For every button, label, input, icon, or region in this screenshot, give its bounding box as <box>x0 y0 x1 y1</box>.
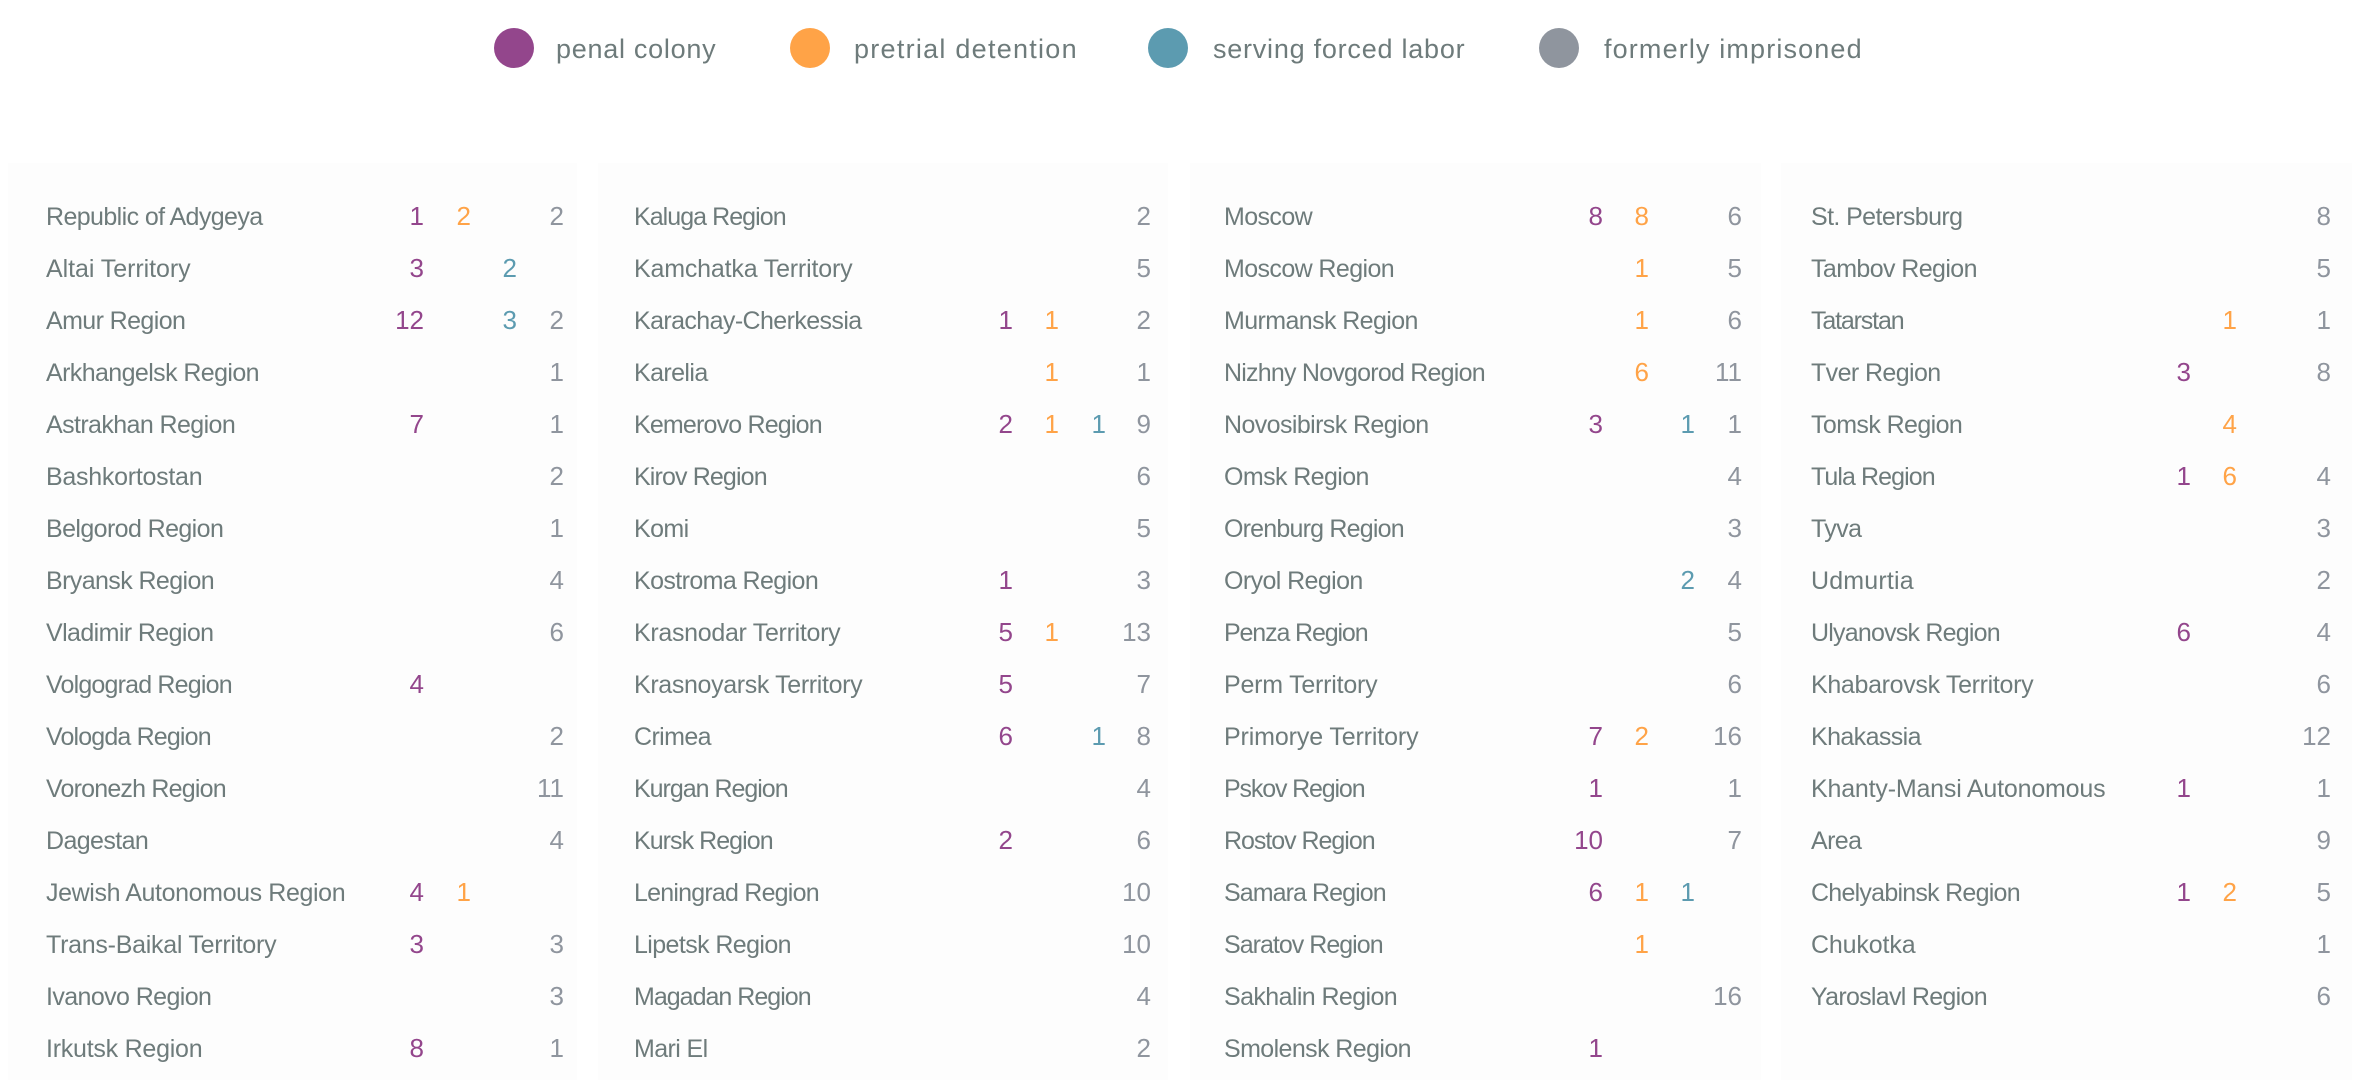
row: Kaluga Region: 2 <box>1137 201 1151 231</box>
row: Kurgan Region: Kurgan Region <box>634 775 788 803</box>
row: Kursk Region <box>634 825 1151 855</box>
legend <box>494 28 1862 68</box>
row: Kemerovo Region: 1 <box>1092 409 1106 439</box>
row: St. Petersburg: 8 <box>2317 201 2331 231</box>
row: Kemerovo Region <box>634 409 1151 439</box>
row: Voronezh Region <box>46 773 564 803</box>
row: Omsk Region: 4 <box>1728 461 1742 491</box>
row: Trans-Baikal Territory <box>46 929 564 959</box>
row: Ulyanovsk Region: 4 <box>2317 617 2331 647</box>
row: Primorye Territory: 2 <box>1635 721 1649 751</box>
panel: column 2 <box>598 163 1168 1080</box>
row: Karelia: 1 <box>1045 357 1059 387</box>
row: Republic of Adygeya: 1 <box>410 201 424 231</box>
row: Kemerovo Region: 9 <box>1137 409 1151 439</box>
row: Oryol Region: Oryol Region <box>1224 567 1363 595</box>
row: Ulyanovsk Region <box>1811 617 2331 647</box>
row: Khabarovsk Territory <box>1811 669 2331 699</box>
row: Krasnoyarsk Territory: 7 <box>1137 669 1151 699</box>
row: Kostroma Region: 1 <box>999 565 1013 595</box>
row: Republic of Adygeya: Republic of Adygeya <box>46 203 263 231</box>
row: Komi: 5 <box>1137 513 1151 543</box>
row: Krasnodar Territory: Krasnodar Territory <box>634 619 841 647</box>
row: Rostov Region <box>1224 825 1742 855</box>
row: Tula Region: 6 <box>2223 461 2237 491</box>
row: Tatarstan: 1 <box>2317 305 2331 335</box>
row: Karelia: 1 <box>1137 357 1151 387</box>
row: Kostroma Region <box>634 565 1151 595</box>
row: Kamchatka Territory <box>634 253 1151 283</box>
legend item: pretrial detention: pretrial detention <box>854 34 1077 64</box>
row: Udmurtia: Udmurtia <box>1811 567 1914 595</box>
row: Karachay-Cherkessia <box>634 305 1151 335</box>
row: Krasnoyarsk Territory: Krasnoyarsk Territory <box>634 671 863 699</box>
row: Ulyanovsk Region: Ulyanovsk Region <box>1811 619 2000 647</box>
row: Udmurtia <box>1811 565 2331 595</box>
row: Kirov Region: Kirov Region <box>634 463 767 491</box>
row: Smolensk Region <box>1224 1033 1603 1063</box>
row: Arkhangelsk Region: 1 <box>550 357 564 387</box>
row: Khakassia: 12 <box>2302 721 2331 751</box>
row: Volgograd Region: 4 <box>410 669 424 699</box>
row: Karachay-Cherkessia: 2 <box>1137 305 1151 335</box>
row: Novosibirsk Region <box>1224 409 1742 439</box>
row: Perm Territory: Perm Territory <box>1224 671 1378 699</box>
row: Altai Territory: 3 <box>410 253 424 283</box>
row: Arkhangelsk Region: Arkhangelsk Region <box>46 359 259 387</box>
row: Karelia <box>634 357 1151 387</box>
row: Bryansk Region: 4 <box>550 565 564 595</box>
row: Republic of Adygeya: 2 <box>550 201 564 231</box>
row: Pskov Region: Pskov Region <box>1224 775 1365 803</box>
row: Trans-Baikal Territory: 3 <box>410 929 424 959</box>
row: Astrakhan Region <box>46 409 564 439</box>
legend item: serving forced labor: serving forced labor <box>1213 34 1465 64</box>
row: Krasnoyarsk Territory <box>634 669 1151 699</box>
row: Area <box>1811 825 2331 855</box>
row: Komi: Komi <box>634 515 689 543</box>
legend item: pretrial detention <box>790 28 1077 68</box>
row: Volgograd Region: Volgograd Region <box>46 671 232 699</box>
row: Altai Territory: Altai Territory <box>46 255 191 283</box>
row: Tomsk Region <box>1811 409 2237 439</box>
row: Ivanovo Region <box>46 981 564 1011</box>
row: Karelia: Karelia <box>634 359 708 387</box>
row: Crimea: 8 <box>1137 721 1151 751</box>
row: Samara Region <box>1224 877 1695 907</box>
row: Komi <box>634 513 1151 543</box>
row: Tver Region: 3 <box>2177 357 2191 387</box>
legend item: formerly imprisoned <box>1539 28 1862 68</box>
row: Amur Region: 2 <box>550 305 564 335</box>
row: Samara Region: 1 <box>1681 877 1695 907</box>
row: Murmansk Region <box>1224 305 1742 335</box>
row: Primorye Territory <box>1224 721 1742 751</box>
row: Kirov Region <box>634 461 1151 491</box>
row: Pskov Region <box>1224 773 1742 803</box>
row: Rostov Region: 10 <box>1574 825 1603 855</box>
row: Omsk Region <box>1224 461 1742 491</box>
row: Kamchatka Territory: Kamchatka Territory <box>634 255 853 283</box>
row: Tomsk Region: Tomsk Region <box>1811 411 1962 439</box>
legend item: penal colony: penal colony <box>556 34 716 64</box>
row: St. Petersburg: St. Petersburg <box>1811 203 1962 231</box>
row: Chukotka: 1 <box>2317 929 2331 959</box>
row: Jewish Autonomous Region: 1 <box>457 877 471 907</box>
row: Dagestan: 4 <box>550 825 564 855</box>
row: Leningrad Region: 10 <box>1122 877 1151 907</box>
row: Bryansk Region: Bryansk Region <box>46 567 214 595</box>
row: Penza Region <box>1224 617 1742 647</box>
row: Vologda Region: Vologda Region <box>46 723 211 751</box>
row: Ulyanovsk Region: 6 <box>2177 617 2191 647</box>
row: Kemerovo Region: 1 <box>1045 409 1059 439</box>
row: Moscow Region <box>1224 253 1742 283</box>
row: Tyva <box>1811 513 2331 543</box>
row: Krasnodar Territory: 5 <box>999 617 1013 647</box>
row: Oryol Region: 2 <box>1681 565 1695 595</box>
row: Bashkortostan <box>46 461 564 491</box>
legend item: serving forced labor <box>1148 28 1465 68</box>
row: Kemerovo Region: 2 <box>999 409 1013 439</box>
row: Vologda Region <box>46 721 564 751</box>
row: Amur Region: 3 <box>503 305 517 335</box>
row: Sakhalin Region: 16 <box>1713 981 1742 1011</box>
row: Samara Region: Samara Region <box>1224 879 1386 907</box>
row: Leningrad Region: Leningrad Region <box>634 879 819 907</box>
row: Yaroslavl Region: Yaroslavl Region <box>1811 983 1987 1011</box>
row: Khanty-Mansi Autonomous: 1 <box>2177 773 2191 803</box>
panel: column 4 <box>1781 163 2352 1080</box>
row: Irkutsk Region: Irkutsk Region <box>46 1035 202 1063</box>
row: Primorye Territory: 7 <box>1589 721 1603 751</box>
row: Udmurtia: 2 <box>2317 565 2331 595</box>
row: Arkhangelsk Region <box>46 357 564 387</box>
row: Crimea: Crimea <box>634 723 712 751</box>
row: Chukotka: Chukotka <box>1811 931 1916 959</box>
row: Ivanovo Region: 3 <box>550 981 564 1011</box>
row: Moscow: 8 <box>1635 201 1649 231</box>
row: Chelyabinsk Region <box>1811 877 2331 907</box>
row: Magadan Region <box>634 981 1151 1011</box>
row: Chukotka <box>1811 929 2331 959</box>
row: Oryol Region <box>1224 565 1742 595</box>
row: Crimea <box>634 721 1151 751</box>
row: Republic of Adygeya: 2 <box>457 201 471 231</box>
row: Saratov Region: 1 <box>1635 929 1649 959</box>
row: Moscow: Moscow <box>1224 203 1314 231</box>
row: Novosibirsk Region: 3 <box>1589 409 1603 439</box>
row: Bashkortostan: Bashkortostan <box>46 463 202 491</box>
row: Irkutsk Region: 8 <box>410 1033 424 1063</box>
row: Murmansk Region: 6 <box>1728 305 1742 335</box>
row: Samara Region: 6 <box>1589 877 1603 907</box>
row: Leningrad Region <box>634 877 1151 907</box>
legend item: penal colony <box>494 28 716 68</box>
row: Belgorod Region <box>46 513 564 543</box>
row: Irkutsk Region <box>46 1033 564 1063</box>
row: Saratov Region: Saratov Region <box>1224 931 1383 959</box>
row: Khabarovsk Territory: 6 <box>2317 669 2331 699</box>
row: Voronezh Region: Voronezh Region <box>46 775 226 803</box>
row: Jewish Autonomous Region <box>46 877 471 907</box>
row: Altai Territory: 2 <box>503 253 517 283</box>
row: Nizhny Novgorod Region: 11 <box>1715 357 1742 387</box>
row: Moscow Region: 5 <box>1728 253 1742 283</box>
row: Magadan Region: Magadan Region <box>634 983 811 1011</box>
panel: column 1 <box>8 163 577 1080</box>
row: Kaluga Region: Kaluga Region <box>634 203 786 231</box>
row: Chelyabinsk Region: 1 <box>2177 877 2191 907</box>
row: Karachay-Cherkessia: 1 <box>999 305 1013 335</box>
row: Krasnoyarsk Territory: 5 <box>999 669 1013 699</box>
row: Jewish Autonomous Region: 4 <box>410 877 424 907</box>
row: Rostov Region: 7 <box>1728 825 1742 855</box>
row: Vologda Region: 2 <box>550 721 564 751</box>
row: Primorye Territory: 16 <box>1713 721 1742 751</box>
row: Murmansk Region: Murmansk Region <box>1224 307 1418 335</box>
row: Tambov Region <box>1811 253 2331 283</box>
row: Altai Territory <box>46 253 517 283</box>
row: Khanty-Mansi Autonomous: Khanty-Mansi Autonomous <box>1811 775 2105 803</box>
row: St. Petersburg <box>1811 201 2331 231</box>
row: Belgorod Region: 1 <box>550 513 564 543</box>
row: Kemerovo Region: Kemerovo Region <box>634 411 822 439</box>
row: Khakassia: Khakassia <box>1811 723 1922 751</box>
row: Dagestan <box>46 825 564 855</box>
row: Voronezh Region: 11 <box>537 773 564 803</box>
row: Kostroma Region: Kostroma Region <box>634 567 818 595</box>
row: Bashkortostan: 2 <box>550 461 564 491</box>
row: Tyva: 3 <box>2317 513 2331 543</box>
row: Tver Region: Tver Region <box>1811 359 1941 387</box>
row: Tatarstan: 1 <box>2223 305 2237 335</box>
row: Irkutsk Region: 1 <box>550 1033 564 1063</box>
row: Mari El <box>634 1033 1151 1063</box>
row: Amur Region: 12 <box>395 305 424 335</box>
row: Chelyabinsk Region: 2 <box>2223 877 2237 907</box>
row: Tula Region: 1 <box>2177 461 2191 491</box>
row: Dagestan: Dagestan <box>46 827 148 855</box>
row: Nizhny Novgorod Region: 6 <box>1635 357 1649 387</box>
row: Krasnodar Territory <box>634 617 1151 647</box>
row: Kirov Region: 6 <box>1137 461 1151 491</box>
row: Republic of Adygeya <box>46 201 564 231</box>
row: Mari El: 2 <box>1137 1033 1151 1063</box>
row: Tatarstan: Tatarstan <box>1811 307 1904 335</box>
row: Kursk Region: 6 <box>1137 825 1151 855</box>
row: Trans-Baikal Territory: Trans-Baikal Territory <box>46 931 277 959</box>
row: Tver Region <box>1811 357 2331 387</box>
row: Moscow: 8 <box>1589 201 1603 231</box>
row: Crimea: 6 <box>999 721 1013 751</box>
legend item: formerly imprisoned: formerly imprisoned <box>1604 34 1862 64</box>
row: Moscow Region: 1 <box>1635 253 1649 283</box>
row: Kursk Region: 2 <box>999 825 1013 855</box>
row: Smolensk Region: 1 <box>1589 1033 1603 1063</box>
row: Chelyabinsk Region: 5 <box>2317 877 2331 907</box>
row: Tyva: Tyva <box>1811 515 1862 543</box>
row: Lipetsk Region: 10 <box>1122 929 1151 959</box>
row: Smolensk Region: Smolensk Region <box>1224 1035 1411 1063</box>
row: Moscow Region: Moscow Region <box>1224 255 1394 283</box>
panel: column 3 <box>1190 163 1761 1080</box>
row: Tomsk Region: 4 <box>2223 409 2237 439</box>
row: Novosibirsk Region: 1 <box>1728 409 1742 439</box>
row: Volgograd Region <box>46 669 424 699</box>
row: Murmansk Region: 1 <box>1635 305 1649 335</box>
row: Kurgan Region <box>634 773 1151 803</box>
row: Samara Region: 1 <box>1635 877 1649 907</box>
row: Kursk Region: Kursk Region <box>634 827 773 855</box>
row: Moscow <box>1224 201 1742 231</box>
row: Nizhny Novgorod Region: Nizhny Novgorod Region <box>1224 359 1485 387</box>
row: Yaroslavl Region <box>1811 981 2331 1011</box>
row: Nizhny Novgorod Region <box>1224 357 1742 387</box>
row: Trans-Baikal Territory: 3 <box>550 929 564 959</box>
row: Orenburg Region <box>1224 513 1742 543</box>
row: Chelyabinsk Region: Chelyabinsk Region <box>1811 879 2020 907</box>
row: Lipetsk Region <box>634 929 1151 959</box>
row: Amur Region <box>46 305 564 335</box>
row: Sakhalin Region: Sakhalin Region <box>1224 983 1397 1011</box>
row: Crimea: 1 <box>1092 721 1106 751</box>
row: Kostroma Region: 3 <box>1137 565 1151 595</box>
row: Ivanovo Region: Ivanovo Region <box>46 983 211 1011</box>
row: Novosibirsk Region: 1 <box>1681 409 1695 439</box>
row: Primorye Territory: Primorye Territory <box>1224 723 1419 751</box>
row: Belgorod Region: Belgorod Region <box>46 515 223 543</box>
row: Astrakhan Region: Astrakhan Region <box>46 411 235 439</box>
row: Kamchatka Territory: 5 <box>1137 253 1151 283</box>
row: Moscow: 6 <box>1728 201 1742 231</box>
row: Kurgan Region: 4 <box>1137 773 1151 803</box>
row: Karachay-Cherkessia: 1 <box>1045 305 1059 335</box>
row: Jewish Autonomous Region: Jewish Autonomous Region <box>46 879 345 907</box>
row: Vladimir Region: Vladimir Region <box>46 619 213 647</box>
row: Perm Territory: 6 <box>1728 669 1742 699</box>
row: Pskov Region: 1 <box>1728 773 1742 803</box>
row: Perm Territory <box>1224 669 1742 699</box>
row: Orenburg Region: Orenburg Region <box>1224 515 1404 543</box>
row: Bryansk Region <box>46 565 564 595</box>
row: Sakhalin Region <box>1224 981 1742 1011</box>
row: Astrakhan Region: 7 <box>410 409 424 439</box>
row: Tula Region: Tula Region <box>1811 463 1935 491</box>
row: Yaroslavl Region: 6 <box>2317 981 2331 1011</box>
row: Tambov Region: Tambov Region <box>1811 255 1977 283</box>
row: Oryol Region: 4 <box>1728 565 1742 595</box>
row: Khakassia <box>1811 721 2331 751</box>
row: Khanty-Mansi Autonomous <box>1811 773 2331 803</box>
row: Krasnodar Territory: 1 <box>1045 617 1059 647</box>
row: Lipetsk Region: Lipetsk Region <box>634 931 791 959</box>
row: Tambov Region: 5 <box>2317 253 2331 283</box>
row: Omsk Region: Omsk Region <box>1224 463 1369 491</box>
row: Penza Region: 5 <box>1728 617 1742 647</box>
row: Area: 9 <box>2317 825 2331 855</box>
row: Area: Area <box>1811 827 1862 855</box>
row: Krasnodar Territory: 13 <box>1122 617 1151 647</box>
row: Rostov Region: Rostov Region <box>1224 827 1375 855</box>
row: Khabarovsk Territory: Khabarovsk Territory <box>1811 671 2034 699</box>
row: Khanty-Mansi Autonomous: 1 <box>2317 773 2331 803</box>
row: Tver Region: 8 <box>2317 357 2331 387</box>
row: Vladimir Region: 6 <box>550 617 564 647</box>
row: Karachay-Cherkessia: Karachay-Cherkessia <box>634 307 862 335</box>
row: Saratov Region <box>1224 929 1649 959</box>
row: Tatarstan <box>1811 305 2331 335</box>
row: Penza Region: Penza Region <box>1224 619 1368 647</box>
row: Amur Region: Amur Region <box>46 307 185 335</box>
row: Astrakhan Region: 1 <box>550 409 564 439</box>
row: Tula Region <box>1811 461 2331 491</box>
row: Orenburg Region: 3 <box>1728 513 1742 543</box>
row: Mari El: Mari El <box>634 1035 708 1063</box>
row: Kaluga Region <box>634 201 1151 231</box>
row: Magadan Region: 4 <box>1137 981 1151 1011</box>
row: Tula Region: 4 <box>2317 461 2331 491</box>
row: Pskov Region: 1 <box>1589 773 1603 803</box>
row: Vladimir Region <box>46 617 564 647</box>
row: Novosibirsk Region: Novosibirsk Region <box>1224 411 1429 439</box>
